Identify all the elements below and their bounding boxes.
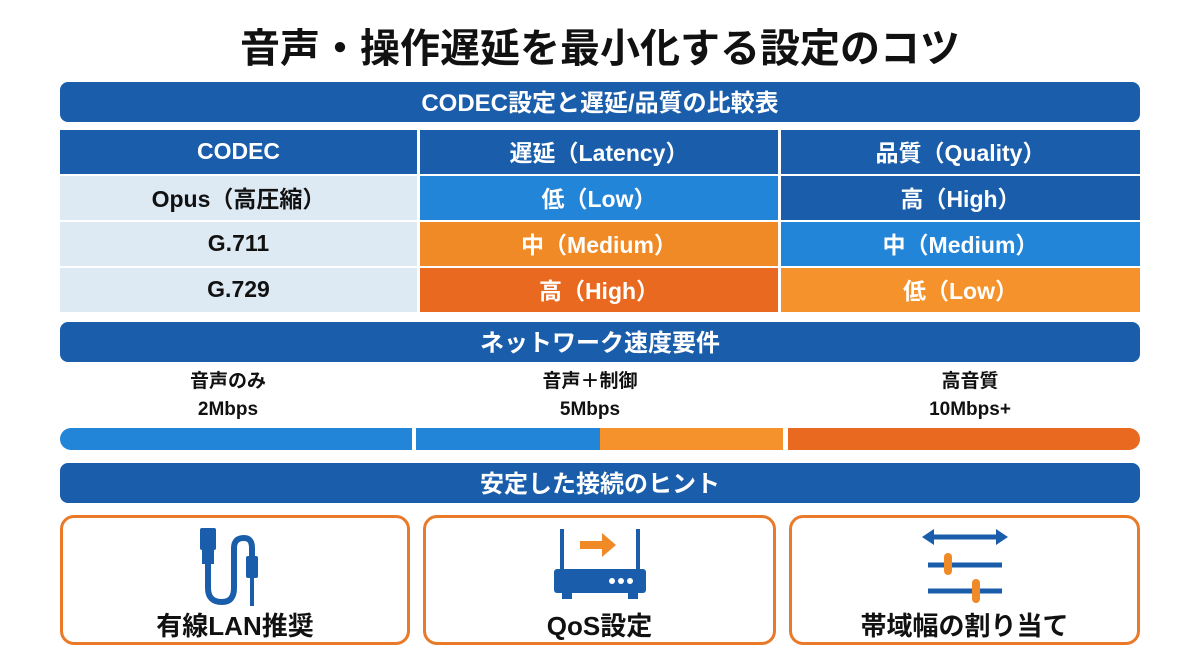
label: high quality: 10Mbps+ (929, 399, 1011, 420)
card: wired LAN: 有線LAN推奨 (156, 611, 314, 641)
table: codec comparison: CODEC (197, 138, 280, 164)
icon: sliders (922, 529, 1008, 603)
icon: LAN cable (200, 528, 258, 606)
table: codec comparison: G.711 (208, 230, 269, 256)
heading: codec table: CODEC設定と遅延/品質の比較表 (421, 90, 779, 116)
card: bandwidth allocation: 帯域幅の割り当て (860, 611, 1068, 641)
table: codec comparison: 品質（Quality） (876, 140, 1045, 166)
table: codec comparison: 低（Low） (542, 186, 656, 212)
title: 音声・操作遅延を最小化する設定のコツ (240, 27, 960, 71)
card: QoS (423, 515, 776, 645)
table: codec comparison: 中（Medium） (883, 232, 1038, 258)
heading: network speed: ネットワーク速度要件 (480, 330, 720, 356)
table: codec comparison: 低（Low） (903, 278, 1018, 304)
table: codec comparison: 高（High） (539, 278, 659, 304)
table: codec comparison: 高（High） (900, 186, 1021, 212)
icon: router (554, 529, 646, 599)
card: bandwidth allocation (789, 515, 1140, 645)
heading: codec table (60, 82, 1140, 122)
table: codec comparison (60, 130, 1140, 312)
card: wired LAN (60, 515, 410, 645)
table: codec comparison: 遅延（Latency） (510, 140, 688, 166)
label: voice + control: 5Mbps (560, 399, 620, 420)
label: voice only (190, 370, 266, 420)
heading: stable connection: 安定した接続のヒント (480, 470, 720, 498)
heading: stable connection (60, 463, 1140, 503)
label: voice + control (542, 370, 638, 420)
heading: network speed (60, 322, 1140, 362)
label: high quality (929, 370, 1011, 420)
label: voice only: 音声のみ (190, 371, 266, 392)
table: codec comparison: G.729 (207, 276, 270, 302)
label: voice only: 2Mbps (198, 399, 258, 420)
label: voice + control: 音声＋制御 (542, 371, 638, 392)
card: QoS: QoS設定 (547, 611, 652, 641)
table: codec comparison: Opus（高圧縮） (152, 186, 325, 212)
speed bar (60, 428, 1140, 450)
table: codec comparison: 中（Medium） (521, 232, 677, 258)
label: high quality: 高音質 (941, 371, 998, 392)
